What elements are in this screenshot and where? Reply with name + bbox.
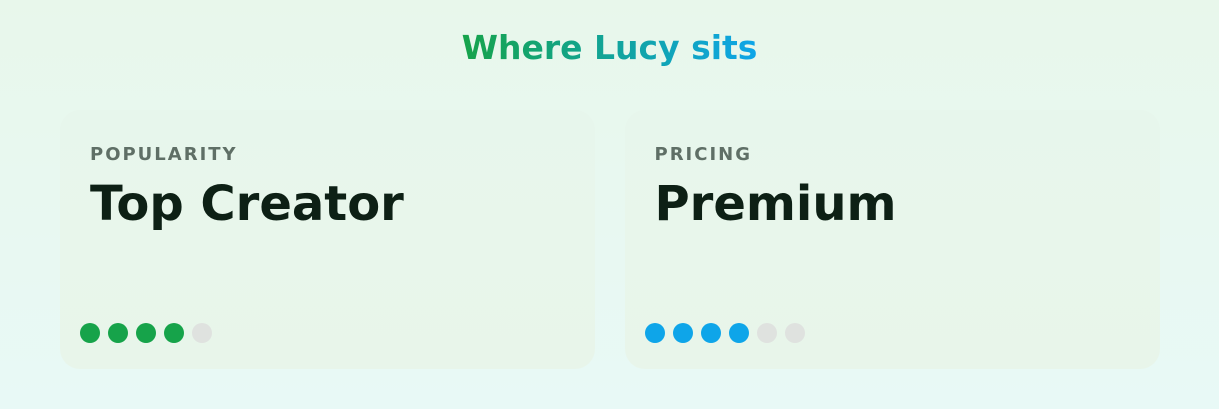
popularity value: Top Creator [90, 176, 404, 232]
title: Where Lucy sits [462, 28, 757, 67]
pricing rating dots [645, 323, 805, 343]
pricing label: PRICING [654, 144, 752, 165]
popularity label: POPULARITY [90, 144, 238, 165]
pricing value: Premium [654, 176, 897, 232]
panel: popularity [60, 110, 595, 369]
panel: pricing [624, 110, 1160, 369]
popularity rating dots [80, 323, 212, 343]
